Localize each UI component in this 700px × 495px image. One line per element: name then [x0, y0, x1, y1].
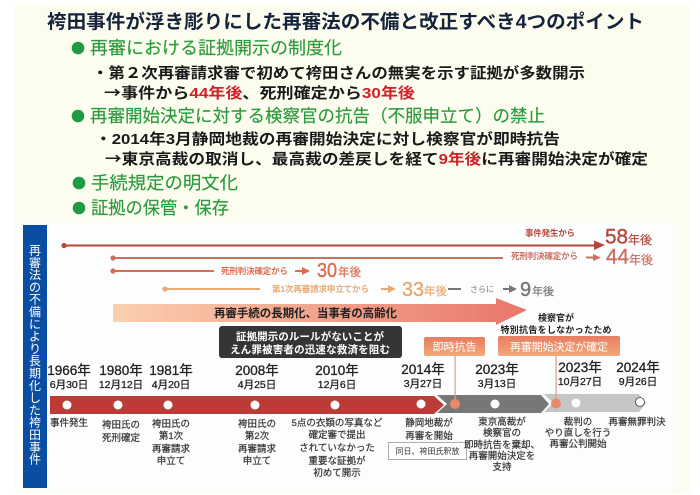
text: point 1 first line: ・第２次再審請求審で初めて袴田さんの無実を示す証拠が多数開示	[92, 62, 585, 83]
event: 1980: 死刑確定	[102, 432, 140, 444]
event: 1980: 1980年	[99, 363, 143, 378]
event: 1981: 1981年	[149, 363, 193, 378]
event: 2010: 12月6日	[318, 379, 356, 391]
event: 1981: 袴田氏の	[152, 418, 190, 430]
duration: 33 years then 9 years: 年後	[424, 284, 447, 298]
duration: 33 years then 9 years: さらに	[470, 285, 494, 294]
event: 1966: 事件発生	[50, 417, 88, 429]
event: 1966	[47, 363, 91, 429]
event: 2023 March: 検察官の	[483, 427, 521, 439]
duration: 58 years	[61, 226, 652, 250]
event: 2014: 再審を開始	[405, 430, 453, 442]
heading: point 3: 手続規定の明文化	[91, 173, 238, 193]
title: 袴田事件が浮き彫りにした再審法の不備と改正すべき4つのポイント	[47, 10, 644, 33]
big arrow: prolonged proceedings: 再審手続の長期化、当事者の高齢化	[214, 306, 398, 320]
label box: retrial decision final: 再審開始決定が確定	[510, 340, 608, 354]
duration: 44 years: 年後	[629, 253, 653, 267]
event: 2023 March: 支持	[492, 461, 512, 473]
event: 2023 October: 裁判の	[564, 416, 592, 428]
event: 2024: 再審無罪判決	[608, 416, 666, 428]
event: 2010: 2010年	[315, 363, 359, 378]
duration: 44 years: 死刑判決確定から	[511, 251, 578, 261]
event: 2008: 袴田氏の	[238, 418, 276, 430]
text: point 2 second line: →東京高裁の取消し、最高裁の差戻しを経て 9年後 に再審開始決定が確定	[105, 148, 648, 169]
event: 1981	[149, 363, 193, 467]
event: 2023 March: 即時抗告を棄却、	[464, 439, 540, 451]
event: 2023 October: 10月27日	[558, 376, 602, 388]
duration: 30 years	[110, 260, 361, 282]
event: 2023 March: 2023年	[475, 362, 519, 377]
callout: dark box: 証拠開示のルールがないことが	[236, 330, 384, 343]
event: 2024	[608, 360, 666, 428]
event: 2014: 静岡地裁が	[405, 417, 453, 429]
event: 2023 October: やり直しを行う	[545, 427, 611, 439]
heading: point 4: 証拠の保管・保存	[91, 198, 229, 218]
side label: vertical heading	[23, 225, 47, 488]
note box: release: 同日、袴田氏釈放	[396, 446, 460, 456]
label box: immediate appeal	[424, 337, 485, 356]
duration: 33 years then 9 years: 第1次再審請求申立てから	[272, 284, 369, 294]
duration: 30 years: 30	[317, 260, 337, 282]
event: 2023 October	[545, 360, 611, 450]
event: 2023 March	[464, 362, 540, 473]
duration: 30 years: 年後	[338, 265, 361, 279]
big arrow: prolonged proceedings	[113, 298, 527, 325]
duration: 44 years: 44	[606, 246, 629, 268]
event: 2008: 再審請求	[238, 443, 276, 455]
event: 2008	[235, 363, 279, 467]
event: 2023 March: 東京高裁が	[478, 416, 526, 428]
event: 1981: 申立て	[157, 455, 185, 467]
label box: immediate appeal: 即時抗告	[432, 340, 476, 354]
note: no special appeal: 特別抗告をしなかったため	[500, 324, 612, 335]
duration: 58 years: 事件発生から	[525, 228, 575, 238]
event: 1980: 袴田氏の	[102, 419, 140, 431]
event: 2008: 2008年	[235, 363, 279, 378]
event: 1981: 再審請求	[152, 443, 190, 455]
event: 1981: 4月20日	[152, 379, 190, 391]
event: 1966: 6月30日	[50, 379, 88, 391]
event: 2024: 2024年	[616, 360, 660, 375]
text: point 2 first line: ・2014年3月静岡地裁の再審開始決定に対し検察官が即時抗告	[95, 128, 560, 149]
note box: release	[388, 442, 466, 460]
callout: dark box	[219, 326, 402, 358]
event: 2023 March: 再審開始決定を	[469, 450, 535, 462]
event: 2023 October: 再審公判開始	[549, 438, 607, 450]
event: 2008: 申立て	[243, 455, 271, 467]
event: 2010: されていなかった	[299, 443, 375, 454]
duration: 58 years: 58	[605, 226, 628, 248]
event: 2023 March: 3月13日	[478, 378, 516, 390]
duration: 58 years: 年後	[628, 233, 652, 247]
event: 2010: 確定審で提出	[308, 429, 366, 441]
event: 2010	[292, 363, 383, 479]
event: 2024: 9月26日	[619, 376, 657, 388]
note: no special appeal	[500, 312, 612, 335]
note: no special appeal: 検察官が	[538, 312, 574, 323]
duration: 33 years then 9 years: 年後	[532, 284, 554, 298]
duration: 33 years then 9 years: 9	[520, 279, 531, 301]
label box: retrial decision final	[498, 336, 620, 356]
event: 2008: 4月25日	[238, 379, 276, 391]
heading: point 1: 再審における証拠開示の制度化	[90, 38, 342, 58]
event: 2023 October: 2023年	[558, 360, 602, 375]
duration: 33 years then 9 years: 33	[402, 279, 424, 301]
event: 2008: 第2次	[245, 430, 270, 442]
heading: point 2: 再審開始決定に対する検察官の抗告（不服申立て）の禁止	[90, 106, 545, 126]
event: 2014: 3月27日	[404, 378, 442, 390]
side label: vertical heading: 再審法の不備により長期化した袴田事件	[29, 244, 41, 467]
timeline band	[50, 356, 646, 414]
panel: timeline background	[16, 222, 678, 490]
event: 1980	[99, 363, 143, 444]
duration: 44 years	[110, 246, 653, 268]
event: 1980: 12月12日	[99, 379, 143, 391]
event: 2010: 初めて開示	[313, 467, 361, 479]
event: 1981: 第1次	[159, 430, 184, 442]
duration: 30 years: 死刑判決確定から	[221, 266, 288, 276]
event: 2010: 重要な証拠が	[308, 455, 366, 467]
event: 2014	[401, 362, 453, 442]
duration: 33 years then 9 years	[162, 279, 554, 301]
event: 2014: 2014年	[401, 362, 445, 377]
event: 2010: 5点の衣類の写真など	[292, 417, 383, 429]
text: point 1 second line: →事件から 44年後 、死刑確定から 30年後	[104, 82, 415, 103]
callout: dark box: えん罪被害者の迅速な救済を阻む	[230, 343, 390, 356]
event: 1966: 1966年	[47, 363, 91, 378]
panel: four points text	[72, 38, 648, 218]
